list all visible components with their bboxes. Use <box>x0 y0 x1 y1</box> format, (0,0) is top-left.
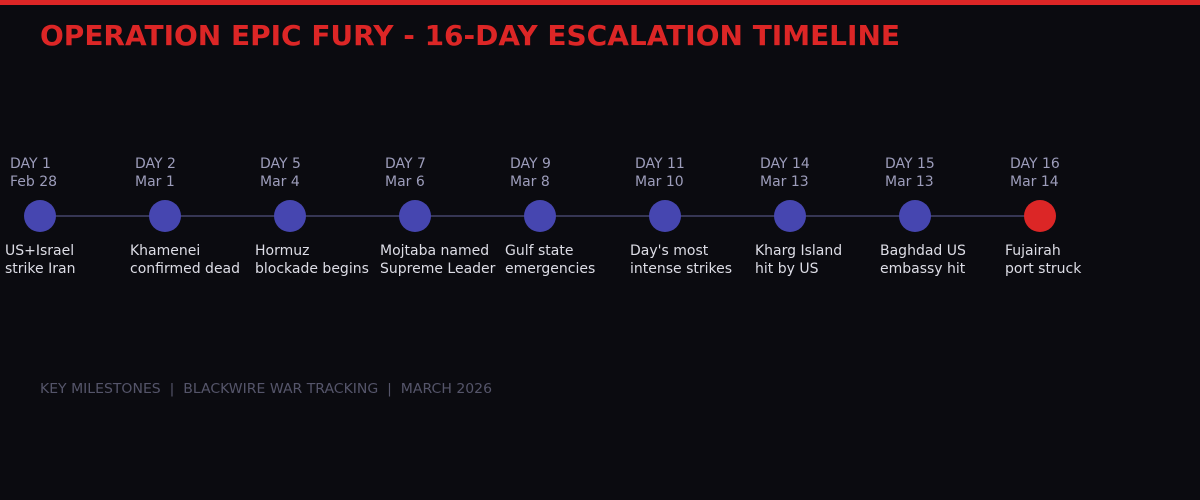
milestone: day 11 <box>630 156 732 277</box>
milestone: day 1: Feb 28 <box>10 174 57 190</box>
milestone: day 5: Mar 4 <box>260 174 300 190</box>
milestone: day 7: Mar 6 <box>385 174 425 190</box>
milestone: day 9: Gulf state <box>505 243 573 259</box>
milestone: day 9: Mar 8 <box>510 174 550 190</box>
milestone: day 1: US+Israel <box>5 243 74 259</box>
milestone: day 15: embassy hit <box>880 261 966 277</box>
milestone: day 7 <box>380 156 496 277</box>
milestone: day 14: DAY 14 <box>760 156 810 172</box>
milestone: day 14 <box>755 156 842 277</box>
milestone: day 7: Mojtaba named <box>380 243 489 259</box>
milestone: day 1 <box>5 156 75 277</box>
milestone: day 15 <box>880 156 966 277</box>
milestone: day 2: Mar 1 <box>135 174 175 190</box>
milestone: day 2: confirmed dead <box>130 261 240 277</box>
milestone: day 5: DAY 5 <box>260 156 301 172</box>
milestone: day 5: blockade begins <box>255 261 369 277</box>
milestone: day 16 <box>1005 156 1082 277</box>
milestone: day 7: Supreme Leader <box>380 261 496 277</box>
milestone: day 11: Day's most <box>630 243 709 259</box>
milestone: day 14: Kharg Island <box>755 243 842 259</box>
milestone: day 16: DAY 16 <box>1010 156 1060 172</box>
milestone: day 2 <box>130 156 240 277</box>
milestone: day 1: strike Iran <box>5 261 75 277</box>
milestone: day 5 <box>255 156 369 277</box>
milestone: day 16: Mar 14 <box>1010 174 1059 190</box>
milestone: day 9: emergencies <box>505 261 595 277</box>
milestone: day 16: Fujairah <box>1005 243 1061 259</box>
title: OPERATION EPIC FURY - 16-DAY ESCALATION TIMELINE <box>40 19 900 52</box>
milestone: day 15: Baghdad US <box>880 243 966 259</box>
milestone: day 2: DAY 2 <box>135 156 176 172</box>
milestone: day 11: DAY 11 <box>635 156 685 172</box>
milestone: day 5: Hormuz <box>255 243 309 259</box>
milestone: day 11: Mar 10 <box>635 174 684 190</box>
timeline milestones <box>5 156 1082 277</box>
footer: KEY MILESTONES | BLACKWIRE WAR TRACKING | MARCH 2026 <box>40 382 492 397</box>
milestone: day 2: Khamenei <box>130 243 200 259</box>
milestone: day 14: hit by US <box>755 261 819 277</box>
milestone: day 11: intense strikes <box>630 261 732 277</box>
milestone: day 15: Mar 13 <box>885 174 934 190</box>
milestone: day 1: DAY 1 <box>10 156 51 172</box>
milestone: day 14: Mar 13 <box>760 174 809 190</box>
milestone: day 7: DAY 7 <box>385 156 426 172</box>
milestone: day 9 <box>505 156 595 277</box>
milestone: day 9: DAY 9 <box>510 156 551 172</box>
milestone: day 16: port struck <box>1005 261 1082 277</box>
milestone: day 15: DAY 15 <box>885 156 935 172</box>
